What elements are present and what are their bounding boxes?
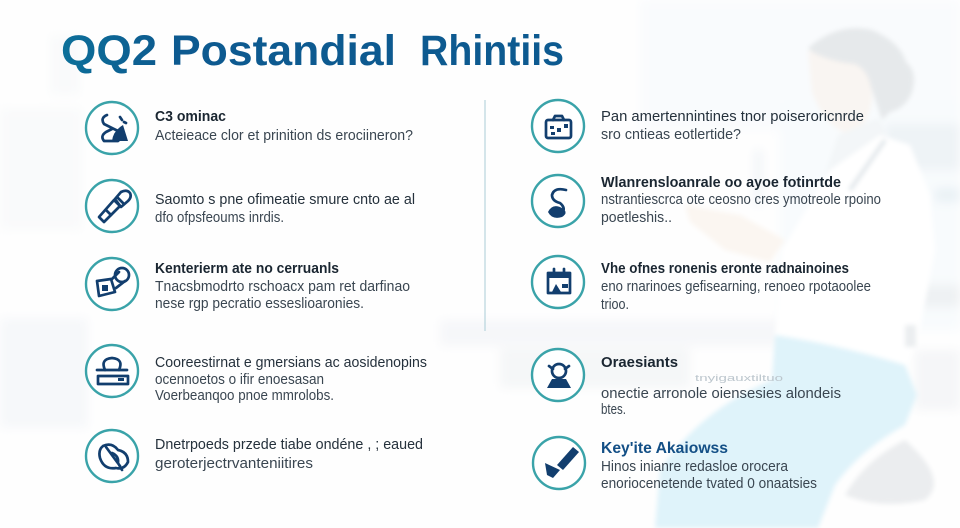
text: item 2: Saomto s pne ofimeatie smure cnto ae al	[155, 192, 415, 208]
text: item 3: nese rgp pecratio esseslioaronies.	[155, 296, 364, 312]
text: item 7	[601, 175, 881, 226]
text: item 8: eno rnarinoes gefisearning, renoeo rpotaoolee	[601, 279, 871, 295]
text: item 8	[601, 261, 871, 313]
text: item 4: Cooreestirnat e gmersians ac aosidenopins	[155, 355, 427, 371]
text: item 7: nstrantiescrca ote ceosno cres ymotreole rpoino	[601, 192, 881, 208]
panel: right item 4	[532, 349, 841, 418]
doctor hair	[808, 28, 914, 120]
text: item 3: Kenterierm ate no cerruanls	[155, 261, 339, 277]
icon: item 7	[532, 175, 584, 227]
panel: left item 2	[86, 180, 415, 232]
text: item 7: poetleshis..	[601, 210, 672, 226]
panel: left item 5	[86, 430, 423, 482]
panel: left item 3	[86, 258, 410, 312]
text: item 8: Vhe ofnes ronenis eronte radnainoines	[601, 261, 849, 277]
text: item 9: onectie arronole oiensesies alondeis	[601, 386, 841, 402]
text: item 10: Key'ite Akaiowss	[601, 440, 728, 457]
text: item 9: tnyigauxtiltuo	[695, 373, 783, 383]
text: item 10: Hinos inianre redasloe orocera	[601, 459, 789, 475]
icon: item 9	[532, 349, 584, 401]
title: Postandial	[171, 27, 396, 75]
text: item 2	[155, 192, 415, 226]
text: item 6: Pan amertennintines tnor poiseroricnrde	[601, 109, 864, 125]
title: Rhintiis	[420, 27, 564, 75]
icon: item 1	[86, 102, 138, 154]
text: item 6: sro cntieas eotlertide?	[601, 127, 741, 143]
text: item 10: enoriocenetende tvated 0 onaatsies	[601, 476, 817, 492]
text: item 9: Oraesiants	[601, 355, 678, 371]
panel: left item 1	[86, 102, 413, 154]
text: item 5: Dnetrpoeds przede tiabe ondéne , ; eaued	[155, 437, 423, 453]
title: QQ2	[61, 27, 157, 75]
text: item 4	[155, 355, 427, 404]
text: item 10	[601, 440, 817, 492]
icon: item 4	[86, 345, 138, 397]
text: item 9	[601, 355, 841, 418]
panel: right item 2	[532, 175, 881, 227]
text: item 5	[155, 437, 423, 472]
text: item 4: Voerbeanqoo pnoe mmrolobs.	[155, 388, 334, 404]
center divider	[484, 100, 486, 331]
text: item 3: Tnacsbmodrto rschoacx pam ret darfinao	[155, 279, 410, 295]
icon: item 5	[86, 430, 138, 482]
text: item 1: Acteieace clor et prinition ds erociineron?	[155, 128, 413, 144]
title	[61, 27, 564, 75]
icon: item 2	[86, 180, 138, 232]
text: item 8: trioo.	[601, 297, 629, 313]
panel: left item 4	[86, 345, 427, 404]
icon: item 10	[533, 437, 585, 489]
text: item 2: dfo ofpsfeoums inrdis.	[155, 210, 284, 226]
text: item 1: C3 ominac	[155, 109, 226, 125]
text: item 1	[155, 109, 413, 144]
panel: right item 1	[532, 100, 864, 152]
icon: item 6	[532, 100, 584, 152]
text: item 3	[155, 261, 410, 312]
text: item 4: ocennoetos o ifir enoesasan	[155, 372, 324, 388]
icon: item 3	[86, 258, 138, 310]
text: item 6	[601, 109, 864, 143]
text: item 9: btes.	[601, 402, 626, 418]
icon: item 8	[532, 256, 584, 308]
text: item 5: geroterjectrvanteniitires	[155, 456, 313, 472]
panel: right item 5	[533, 437, 817, 492]
panel: right item 3	[532, 256, 871, 313]
text: item 7: Wlanrensloanrale oo ayoe fotinrtde	[601, 175, 841, 191]
